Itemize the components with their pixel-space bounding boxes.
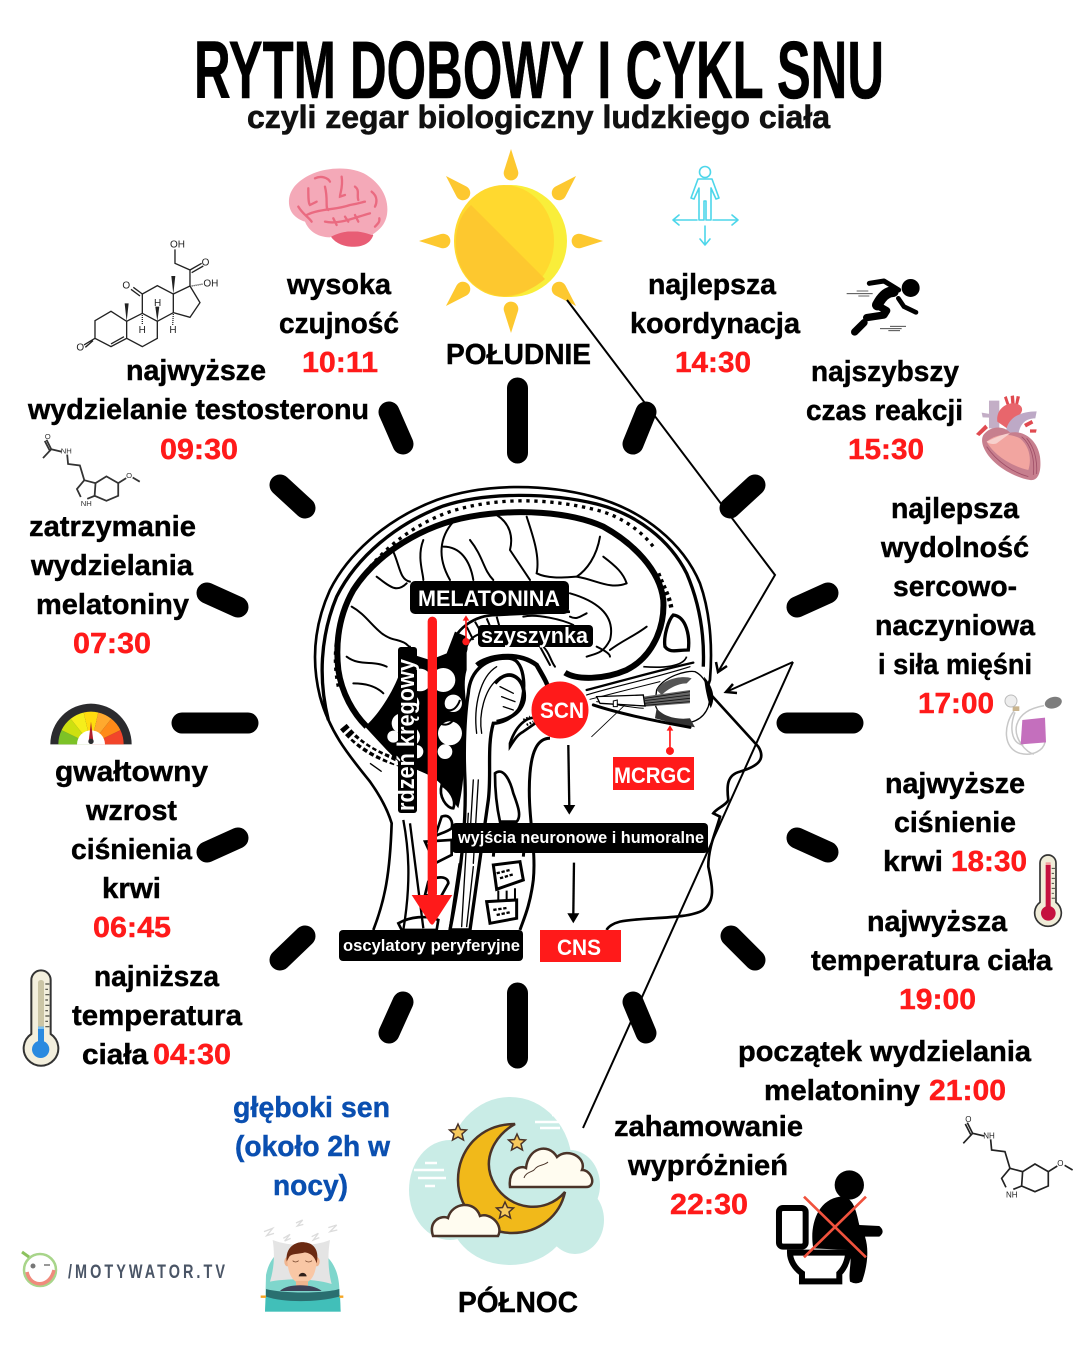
icon: cold thermometer xyxy=(24,970,58,1066)
label: noon: POŁUDNIE xyxy=(446,339,591,371)
label: MCRGC: MCRGC xyxy=(614,763,691,788)
icon: cortisol molecule: H xyxy=(169,325,177,336)
icon: blood pressure monitor xyxy=(1005,695,1063,754)
brainstem xyxy=(450,658,524,930)
text: cardiovascular efficiency: i siła mięśni xyxy=(878,649,1032,681)
red arrow to retina xyxy=(666,725,674,755)
text: melatonin stops: wydzielania xyxy=(30,550,194,582)
text: pressure rise: 06:45 xyxy=(93,912,171,944)
text: highest blood pressure xyxy=(883,768,1027,878)
red descending arrow xyxy=(412,617,452,925)
text: highest blood pressure: 18:30 xyxy=(951,846,1027,878)
text: melatonin stops: 07:30 xyxy=(73,628,151,660)
logo: /MOTYWATOR.TV xyxy=(68,1262,228,1283)
icon: melatonin molecule bottom: NH xyxy=(983,1131,995,1140)
text: high alertness: wysoka xyxy=(286,269,392,301)
icon: cortisol molecule: O xyxy=(202,257,210,268)
text: bowel suppression: zahamowanie xyxy=(614,1111,803,1143)
icon: cortisol molecule xyxy=(76,240,218,354)
label: peripheral oscillators xyxy=(339,930,523,961)
text: lowest temperature: ciała xyxy=(82,1039,149,1071)
skull bone xyxy=(322,495,704,772)
cerebellum xyxy=(365,632,467,808)
thin light pathway lines xyxy=(567,300,793,1128)
text: fastest reaction: najszybszy xyxy=(811,356,959,388)
text: pressure rise: gwałtowny xyxy=(55,756,208,788)
icon: cortisol molecule: H xyxy=(139,325,146,336)
text: melatonin onset xyxy=(738,1036,1032,1107)
text: lowest temperature: temperatura xyxy=(72,1000,243,1032)
eye and optic nerve xyxy=(587,663,713,737)
text: bowel suppression: 22:30 xyxy=(670,1189,748,1221)
label: neural and humoral outputs xyxy=(452,823,708,853)
text: pressure rise: krwi xyxy=(102,873,161,905)
icon: melatonin molecule bottom: O xyxy=(1057,1159,1064,1168)
text: pressure rise xyxy=(55,756,208,944)
text: highest testosterone: 09:30 xyxy=(160,434,238,466)
text: high alertness: 10:11 xyxy=(302,347,378,379)
label: SCN: SCN xyxy=(540,698,584,723)
icon: cortisol molecule: OH xyxy=(203,279,218,290)
text: best coordination: najlepsza xyxy=(648,269,777,301)
text: deep sleep: (około 2h w xyxy=(235,1131,390,1163)
text: highest blood pressure: ciśnienie xyxy=(894,807,1016,839)
text: best coordination xyxy=(630,269,801,379)
text: lowest temperature: najniższa xyxy=(94,961,220,993)
icon: runner xyxy=(847,279,920,332)
icon: cortisol molecule: O xyxy=(76,343,84,354)
text: melatonin onset: 21:00 xyxy=(929,1075,1006,1107)
label: CNS xyxy=(540,930,621,962)
text: cardiovascular efficiency: sercowo- xyxy=(893,571,1017,603)
black arrows xyxy=(563,745,579,923)
text: pressure rise: ciśnienia xyxy=(71,834,193,866)
text: highest blood pressure: najwyższe xyxy=(885,768,1025,800)
diagram: head cross-section xyxy=(315,487,761,930)
text: cardiovascular efficiency: naczyniowa xyxy=(875,610,1036,642)
text: deep sleep: głęboki sen xyxy=(233,1092,390,1124)
text: highest temperature: najwyższa xyxy=(867,906,1008,938)
icon: heart xyxy=(976,395,1040,480)
text: melatonin stops: zatrzymanie xyxy=(29,511,196,543)
icon: cortisol molecule: O xyxy=(122,280,130,291)
label: pineal gland: szyszynka xyxy=(481,623,589,648)
icon: sleeping person xyxy=(261,1220,343,1312)
brain folds xyxy=(347,515,647,693)
text: melatonin stops: melatoniny xyxy=(36,589,189,621)
icon: pressure gauge xyxy=(50,704,132,744)
text: highest testosterone: wydzielanie testosteronu xyxy=(27,394,369,426)
text: highest testosterone: najwyższe xyxy=(126,355,266,387)
text: pressure rise: wzrost xyxy=(85,795,177,827)
label: neural and humoral outputs: wyjścia neuronowe i humoralne xyxy=(457,828,704,847)
icon: melatonin molecule top: NH xyxy=(81,499,92,508)
text: best coordination: koordynacja xyxy=(630,308,801,340)
icon: brain xyxy=(289,169,387,247)
icon: cortisol molecule: H xyxy=(154,298,161,309)
text: lowest temperature xyxy=(72,961,243,1071)
label: melatonin: MELATONINA xyxy=(418,586,560,611)
icon: melatonin molecule bottom: NH xyxy=(1006,1190,1018,1199)
text: highest blood pressure: krwi xyxy=(883,846,943,878)
head outline xyxy=(315,487,761,930)
icon: hot thermometer xyxy=(1035,855,1061,926)
text: bowel suppression xyxy=(614,1111,803,1221)
text: highest temperature: temperatura ciała xyxy=(811,945,1053,977)
label: midnight: PÓŁNOC xyxy=(458,1285,578,1319)
text: high alertness: czujność xyxy=(279,308,399,340)
label: peripheral oscillators: oscylatory peryferyjne xyxy=(343,936,520,955)
icon: human figure with arrows xyxy=(673,166,738,245)
label: SCN xyxy=(532,682,588,738)
corpus callosum xyxy=(452,612,570,655)
throat lines and cervical spine xyxy=(398,738,550,930)
text: cardiovascular efficiency: 17:00 xyxy=(918,688,994,720)
text: fastest reaction: czas reakcji xyxy=(806,395,963,427)
text: highest temperature: 19:00 xyxy=(899,984,976,1016)
icon: toilet with red cross xyxy=(779,1170,883,1283)
text: fastest reaction: 15:30 xyxy=(848,434,924,466)
icon: melatonin molecule top xyxy=(43,432,140,508)
icon: sun xyxy=(419,149,603,333)
red arrow to pineal xyxy=(462,615,470,645)
text: high alertness xyxy=(279,269,399,379)
label: CNS: CNS xyxy=(557,935,601,960)
icon: melatonin molecule bottom xyxy=(963,1115,1073,1199)
label: melatonin xyxy=(410,581,569,614)
subtitle: czyli zegar biologiczny ludzkiego ciała xyxy=(247,99,830,135)
text: deep sleep: nocy) xyxy=(273,1170,348,1202)
icon: melatonin molecule top: NH xyxy=(61,447,72,456)
icon: cortisol molecule: OH xyxy=(170,240,185,251)
icon: moon and clouds xyxy=(409,1097,604,1265)
text: melatonin onset: melatoniny xyxy=(764,1075,920,1107)
text: lowest temperature: 04:30 xyxy=(153,1039,231,1071)
icon: melatonin molecule bottom: O xyxy=(965,1115,972,1124)
icon: melatonin molecule top: O xyxy=(45,432,51,441)
logo xyxy=(22,1252,228,1286)
text: bowel suppression: wypróżnień xyxy=(627,1150,788,1182)
text: deep sleep xyxy=(233,1092,390,1202)
text: cardiovascular efficiency: wydolność xyxy=(880,532,1029,564)
midbrain arc xyxy=(477,656,548,688)
label: spinal cord: rdzeń kręgowy xyxy=(393,658,420,811)
text: highest temperature xyxy=(811,906,1053,1016)
text: best coordination: 14:30 xyxy=(675,347,751,379)
text: melatonin stops xyxy=(29,511,196,660)
text: highest testosterone xyxy=(27,355,369,466)
text: cardiovascular efficiency xyxy=(875,493,1036,720)
icon: melatonin molecule top: O xyxy=(126,471,132,480)
brain outline xyxy=(337,512,663,727)
clock tick marks xyxy=(182,388,853,1058)
text: fastest reaction xyxy=(806,356,963,466)
text: melatonin onset: początek wydzielania xyxy=(738,1036,1032,1068)
text: cardiovascular efficiency: najlepsza xyxy=(891,493,1020,525)
